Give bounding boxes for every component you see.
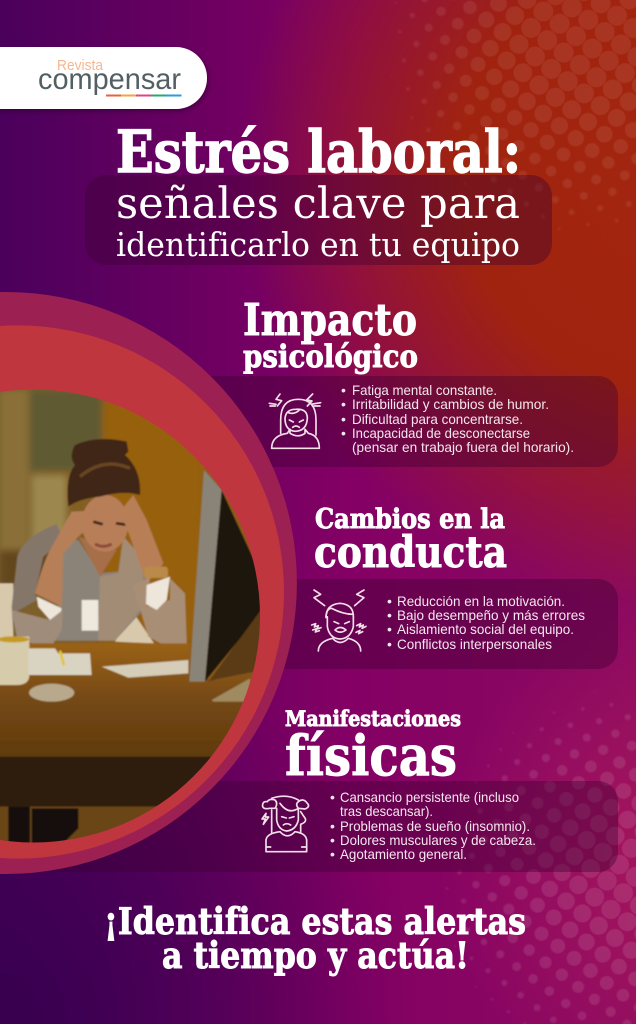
logo text: Revista: Revista	[57, 58, 104, 74]
logo pill	[0, 47, 207, 109]
panel: cambios en la conducta	[0, 579, 618, 669]
bullet list: impacto psicológico: •	[341, 396, 346, 412]
bullet list: manifestaciones físicas: •	[330, 818, 335, 834]
title: señales clave para	[116, 179, 520, 229]
logo text: compensar: compensar	[38, 63, 181, 96]
bullet list: cambios en la conducta: •	[387, 636, 392, 652]
bullet list: cambios en la conducta: •	[387, 593, 392, 609]
right arm	[120, 495, 163, 583]
bullet list: manifestaciones físicas	[330, 789, 536, 862]
bullet list: manifestaciones físicas: Problemas de sueño (insomnio).	[340, 818, 530, 834]
panel: impacto psicológico	[0, 376, 618, 467]
bullet list: manifestaciones físicas: •	[330, 846, 335, 862]
left sleeve	[12, 524, 63, 637]
papers	[28, 648, 92, 675]
title: identificarlo en tu equipo	[116, 225, 520, 264]
icon: stressed woman with lightning	[269, 394, 321, 448]
bullet list: impacto psicológico: Irritabilidad y cambios de humor.	[352, 396, 549, 412]
bullet list: impacto psicológico: Dificultad para concentrarse.	[352, 411, 523, 427]
halftone dots: top right	[395, 0, 636, 230]
bullet list: manifestaciones físicas: Dolores musculares y de cabeza.	[340, 832, 536, 848]
icon: tired woman with clouds	[262, 796, 309, 852]
chair	[0, 583, 154, 643]
bullet list: impacto psicológico: •	[341, 411, 346, 427]
monitor	[189, 470, 222, 682]
closing call to action	[104, 901, 526, 977]
bullet list: cambios en la conducta: Bajo desempeño y más errores	[397, 607, 585, 623]
bullet list: manifestaciones físicas: •	[330, 832, 335, 848]
halftone dots: bottom right	[446, 692, 636, 1024]
heading: cambios en la conducta: Cambios en la	[315, 504, 505, 535]
bullet list: manifestaciones físicas: Agotamiento general.	[340, 846, 467, 862]
hair	[67, 439, 140, 507]
bullet list: manifestaciones físicas: tras descansar).	[340, 803, 433, 819]
neck and face	[78, 537, 117, 577]
bullet list: manifestaciones físicas: Cansancio persistente (incluso	[340, 789, 519, 805]
bullet list: impacto psicológico: Incapacidad de desconectarse	[352, 425, 530, 441]
torso	[55, 537, 147, 641]
panel: manifestaciones físicas	[0, 781, 618, 872]
bullet list: cambios en la conducta: •	[387, 607, 392, 623]
heading: impacto psicológico	[243, 295, 418, 375]
heading: cambios en la conducta: conducta	[314, 528, 507, 578]
title panel	[85, 175, 552, 265]
heading: manifestaciones físicas: físicas	[285, 723, 457, 788]
photo: stressed woman at a desk	[0, 387, 273, 863]
bullet list: impacto psicológico: •	[341, 425, 346, 441]
bullet list: impacto psicológico: (pensar en trabajo fuera del horario).	[352, 439, 574, 455]
icon: stressed man with lightning	[312, 590, 366, 651]
bullet list: impacto psicológico: Fatiga mental constante.	[352, 382, 497, 398]
title	[116, 118, 521, 264]
bullet list: manifestaciones físicas: •	[330, 789, 335, 805]
mouse	[29, 684, 74, 702]
logo colour rule	[106, 94, 182, 96]
bullet list: cambios en la conducta: Aislamiento social del equipo.	[397, 621, 574, 637]
heading: impacto psicológico: Impacto	[243, 295, 417, 346]
heading: manifestaciones físicas: Manifestaciones	[285, 706, 461, 731]
closing call to action: ¡Identifica estas alertas	[104, 901, 526, 943]
photo circles	[0, 292, 297, 874]
title: Estrés laboral:	[116, 118, 521, 186]
bullet list: cambios en la conducta: Conflictos interpersonales	[397, 636, 552, 652]
bullet list: cambios en la conducta: Reducción en la motivación.	[397, 593, 565, 609]
closing call to action: a tiempo y actúa!	[162, 935, 469, 977]
keyboard	[102, 660, 188, 678]
mug	[0, 637, 29, 685]
heading: impacto psicológico: psicológico	[243, 339, 418, 375]
desk	[0, 643, 263, 758]
bullet list: cambios en la conducta: •	[387, 621, 392, 637]
bullet list: cambios en la conducta	[387, 593, 585, 652]
bullet list: impacto psicológico: •	[341, 382, 346, 398]
heading: cambios en la conducta	[314, 504, 507, 578]
bullet list: impacto psicológico	[341, 382, 574, 455]
